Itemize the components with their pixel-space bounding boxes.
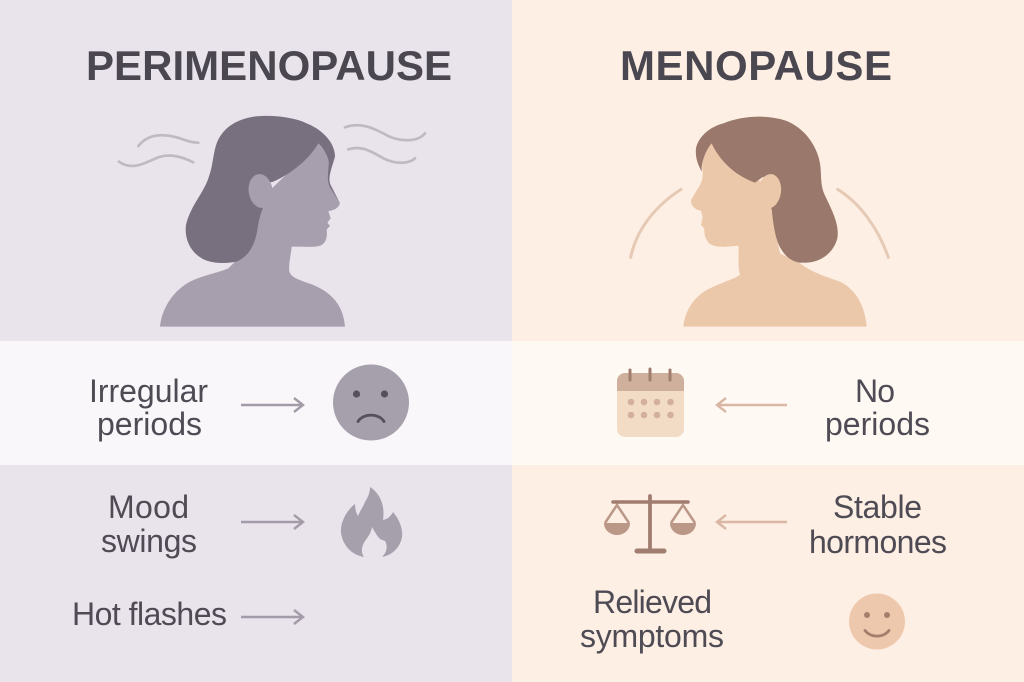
figure: perimenopause woman profile — [160, 116, 345, 327]
title: perimenopause: PERIMENOPAUSE — [86, 42, 452, 89]
label: relieved symptoms: symptoms — [580, 618, 724, 654]
icon: heat waves right — [345, 125, 425, 163]
label: irregular periods: Irregular — [89, 373, 208, 409]
icon: flame — [341, 487, 402, 557]
arrow: no periods — [717, 398, 787, 412]
icon: calendar — [617, 369, 684, 437]
band: menopause highlight row — [512, 341, 1024, 465]
panel: perimenopause background — [0, 0, 512, 682]
label: stable hormones: hormones — [809, 524, 947, 560]
label: stable hormones: Stable — [833, 489, 922, 525]
icon: heat waves left — [119, 135, 198, 166]
icon: calm arc left — [631, 189, 681, 257]
title: menopause: MENOPAUSE — [620, 42, 892, 89]
label: irregular periods: periods — [97, 406, 202, 442]
label: no periods: No — [855, 373, 895, 409]
label: relieved symptoms — [580, 584, 724, 654]
arrow: mood swings — [241, 515, 303, 529]
arrow: irregular periods — [241, 398, 303, 412]
label: mood swings: swings — [101, 523, 197, 559]
icon: balance scale — [604, 496, 696, 551]
icon: sad face — [333, 364, 409, 440]
label: relieved symptoms: Relieved — [593, 584, 712, 620]
label: no periods — [825, 373, 930, 442]
arrow: stable hormones — [717, 515, 787, 529]
band: perimenopause highlight row — [0, 341, 512, 465]
label: irregular periods — [89, 373, 208, 442]
icon: smiling face — [849, 594, 905, 650]
label: mood swings — [101, 489, 197, 559]
icon: calm arc right — [838, 189, 888, 257]
label: mood swings: Mood — [108, 489, 189, 525]
label: no periods: periods — [825, 406, 930, 442]
figure: menopause woman profile — [683, 117, 867, 327]
label: hot flashes: Hot flashes — [72, 596, 227, 632]
arrow: hot flashes — [241, 610, 303, 624]
panel: menopause background — [512, 0, 1024, 682]
label: stable hormones — [809, 489, 947, 560]
